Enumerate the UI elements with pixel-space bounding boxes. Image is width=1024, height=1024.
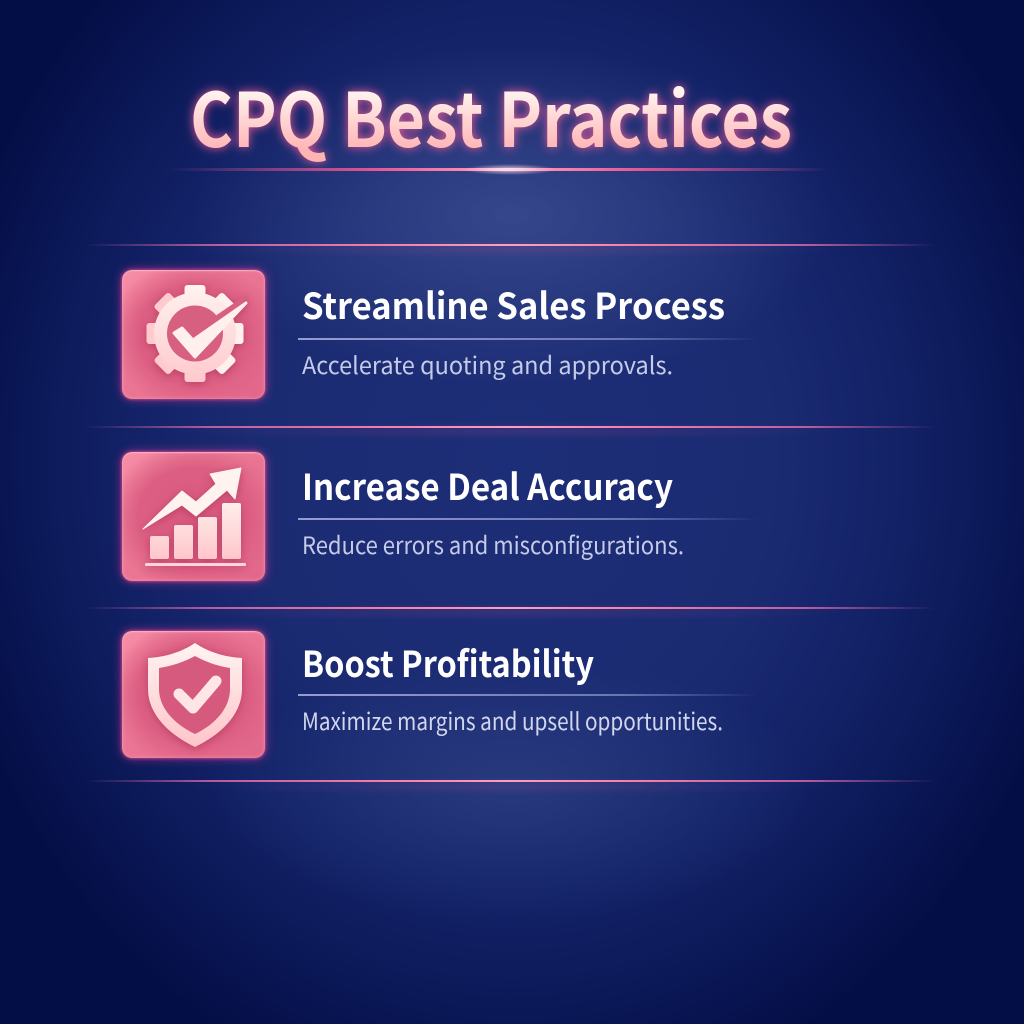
title: CPQ Best Practices [190,60,792,169]
heading: profitability: Boost Profitability [302,636,594,688]
description: accuracy: Reduce errors and misconfigurations. [302,526,684,561]
heading: streamline: Streamline Sales Process [302,278,725,330]
icon: gear with check [122,270,265,399]
panel: streamline sales process [114,262,744,406]
description: streamline: Accelerate quoting and approvals. [302,346,673,381]
description: profitability: Maximize margins and upsell opportunities. [302,702,723,737]
title underline glow [178,164,822,175]
icon: growth bar chart [122,452,265,581]
panel: boost profitability [114,624,744,766]
heading: accuracy: Increase Deal Accuracy [302,459,673,511]
panel: increase deal accuracy [114,444,744,588]
icon: shield with check [122,631,265,758]
